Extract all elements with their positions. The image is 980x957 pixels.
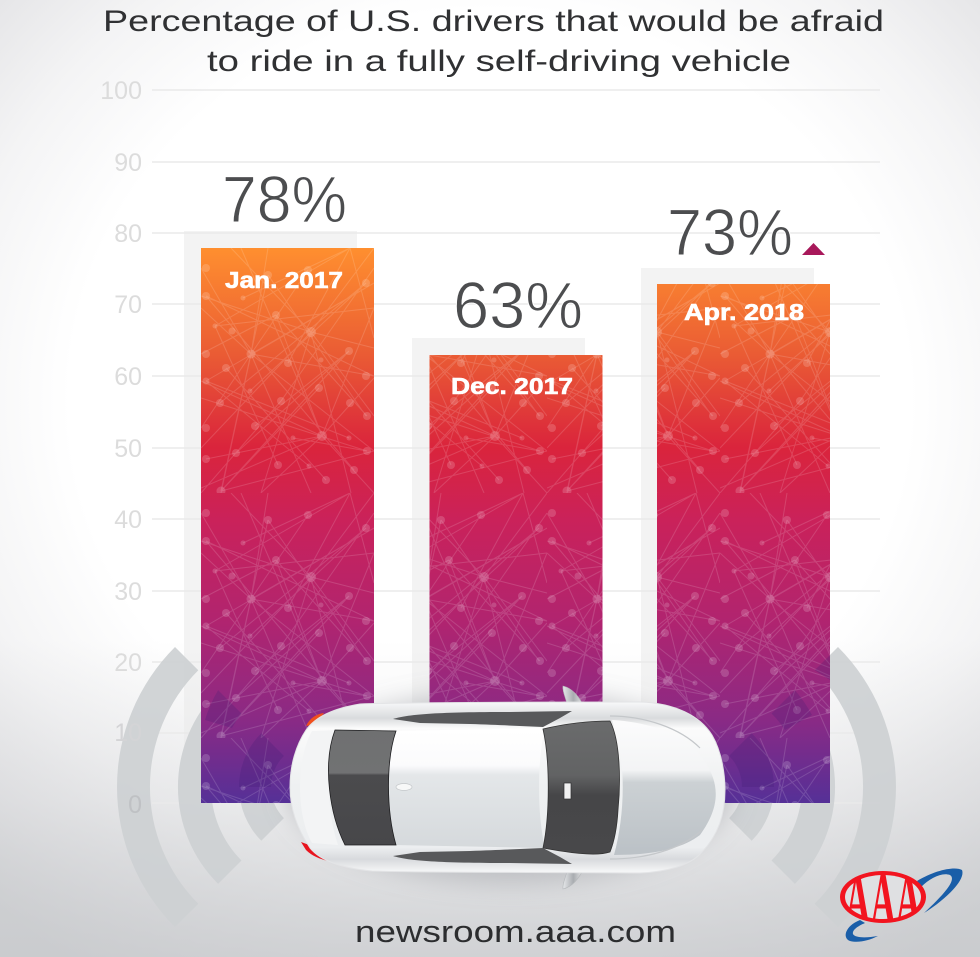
y axis labels: 40 [114, 506, 142, 534]
roof [388, 728, 545, 848]
y axis labels: 70 [114, 291, 142, 319]
y axis labels: 60 [114, 363, 142, 391]
title [103, 5, 884, 78]
car shadow [285, 691, 735, 883]
value: 63%: 63% [453, 268, 583, 342]
sensor waves seen through bars [205, 647, 845, 787]
fender highlights [610, 716, 702, 859]
sensor waves: left [117, 647, 284, 927]
icon: up triangle [802, 243, 825, 255]
bar: Dec. 2017 [430, 355, 602, 803]
y axis labels: 0 [128, 791, 142, 819]
y axis labels: 20 [114, 649, 142, 677]
body shell [290, 702, 725, 873]
y axis labels [100, 77, 142, 819]
logo oval [840, 871, 926, 923]
label: Apr. 2018: Apr. 2018 [684, 299, 804, 325]
mirrors [563, 686, 584, 889]
y axis labels: 10 [114, 719, 142, 747]
shark fin antenna and rear-view mirror [396, 783, 571, 799]
y axis labels: 90 [114, 149, 142, 177]
side windows [393, 711, 572, 864]
bar: Apr. 2018 [657, 284, 830, 803]
y axis labels: 30 [114, 578, 142, 606]
bar shadows [184, 231, 814, 803]
sensor waves: right [729, 647, 896, 927]
hood [612, 720, 716, 855]
rear window [328, 730, 396, 845]
y axis labels: 100 [100, 77, 142, 105]
y axis labels: 50 [114, 435, 142, 463]
label: Dec. 2017: Dec. 2017 [451, 373, 573, 399]
website url: newsroom.aaa.com [355, 914, 676, 949]
value: 78%: 78% [222, 162, 347, 236]
title: Percentage of U.S. drivers that would be afraid [103, 5, 884, 38]
car [290, 686, 725, 889]
logo swoosh [846, 868, 962, 942]
rear deck [300, 730, 340, 845]
taillights [301, 713, 328, 861]
y axis labels: 80 [114, 220, 142, 248]
bar: Jan. 2017 [201, 248, 374, 803]
title: to ride in a fully self-driving vehicle [207, 45, 791, 78]
value: 73%: 73% [667, 195, 793, 269]
label: Jan. 2017: Jan. 2017 [225, 267, 343, 293]
windshield [543, 721, 619, 854]
y axis gridlines [152, 90, 880, 803]
AAA logo [840, 868, 962, 942]
